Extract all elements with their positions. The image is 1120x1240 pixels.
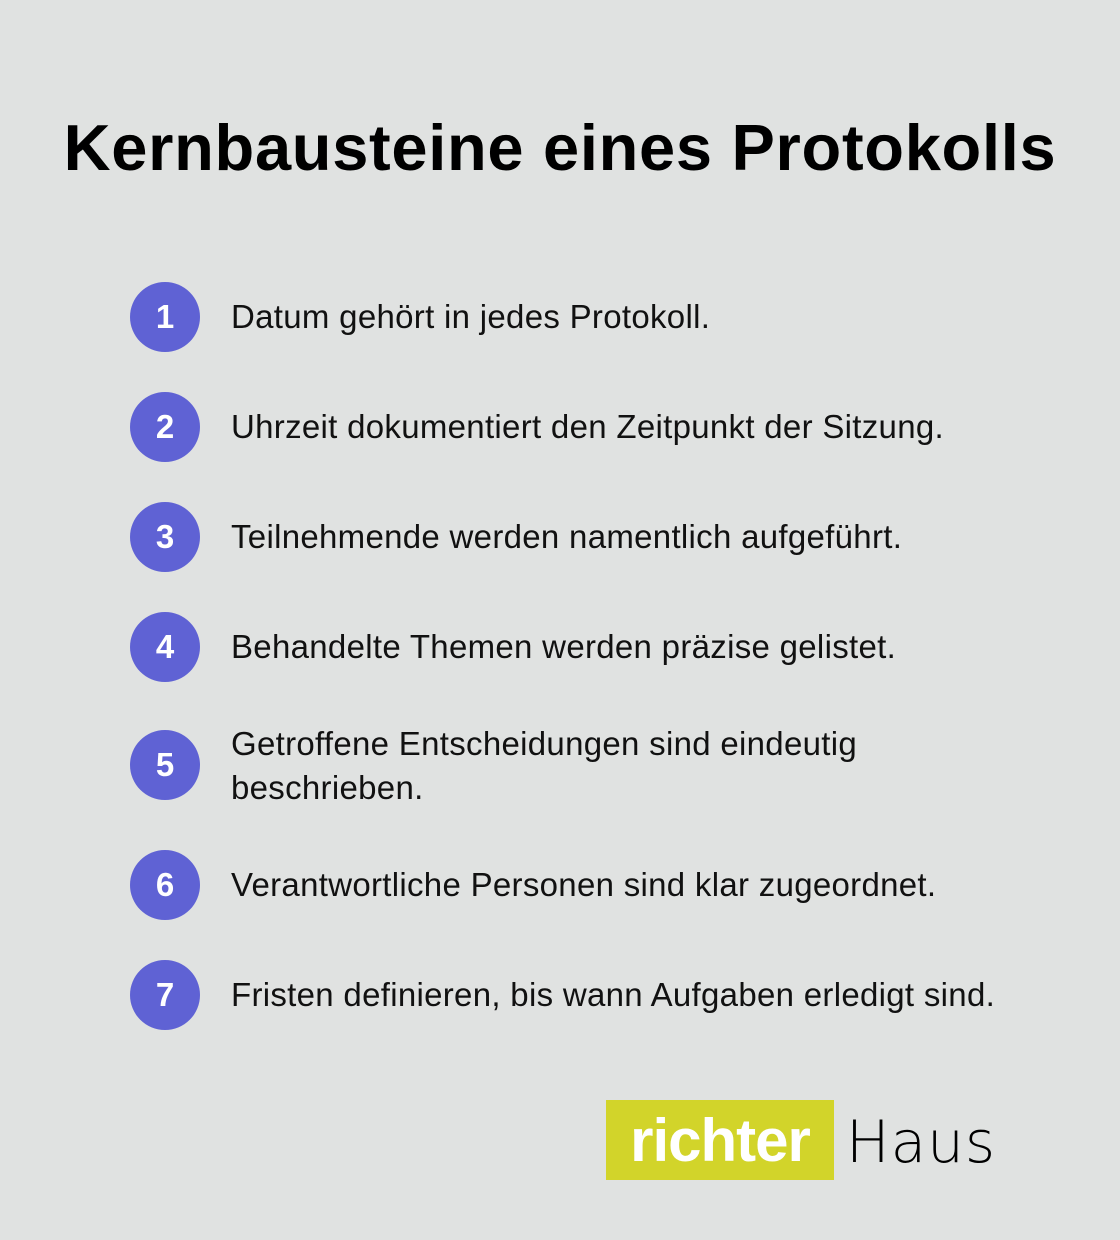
item 6 [130,850,936,920]
item 1: Datum gehört in jedes Protokoll. [231,298,710,335]
logo: Haus: Haus [846,1108,996,1176]
item 5 [130,725,857,806]
title: Kernbausteine eines Protokolls [64,111,1056,184]
item 4: 4 [156,628,174,665]
item 3: Teilnehmende werden namentlich aufgeführt. [231,518,902,555]
item 5: beschrieben. [231,769,424,806]
item 1 [130,282,710,352]
item 2: 2 [156,408,174,445]
item 7: 7 [156,976,174,1013]
item 7 [130,960,995,1030]
item 3: 3 [156,518,174,555]
item 1: 1 [156,298,174,335]
item 3 [130,502,902,572]
item 5: 5 [156,746,174,783]
item 4: Behandelte Themen werden präzise gelistet. [231,628,896,665]
logo: richter box: richter [630,1107,810,1174]
item 6: Verantwortliche Personen sind klar zugeordnet. [231,866,936,903]
item 7: Fristen definieren, bis wann Aufgaben erledigt sind. [231,976,995,1013]
item 2 [130,392,944,462]
item 2: Uhrzeit dokumentiert den Zeitpunkt der Sitzung. [231,408,944,445]
logo: richter box [606,1100,834,1180]
item 5: Getroffene Entscheidungen sind eindeutig [231,725,857,762]
item 4 [130,612,896,682]
logo [606,1100,996,1180]
item 6: 6 [156,866,174,903]
